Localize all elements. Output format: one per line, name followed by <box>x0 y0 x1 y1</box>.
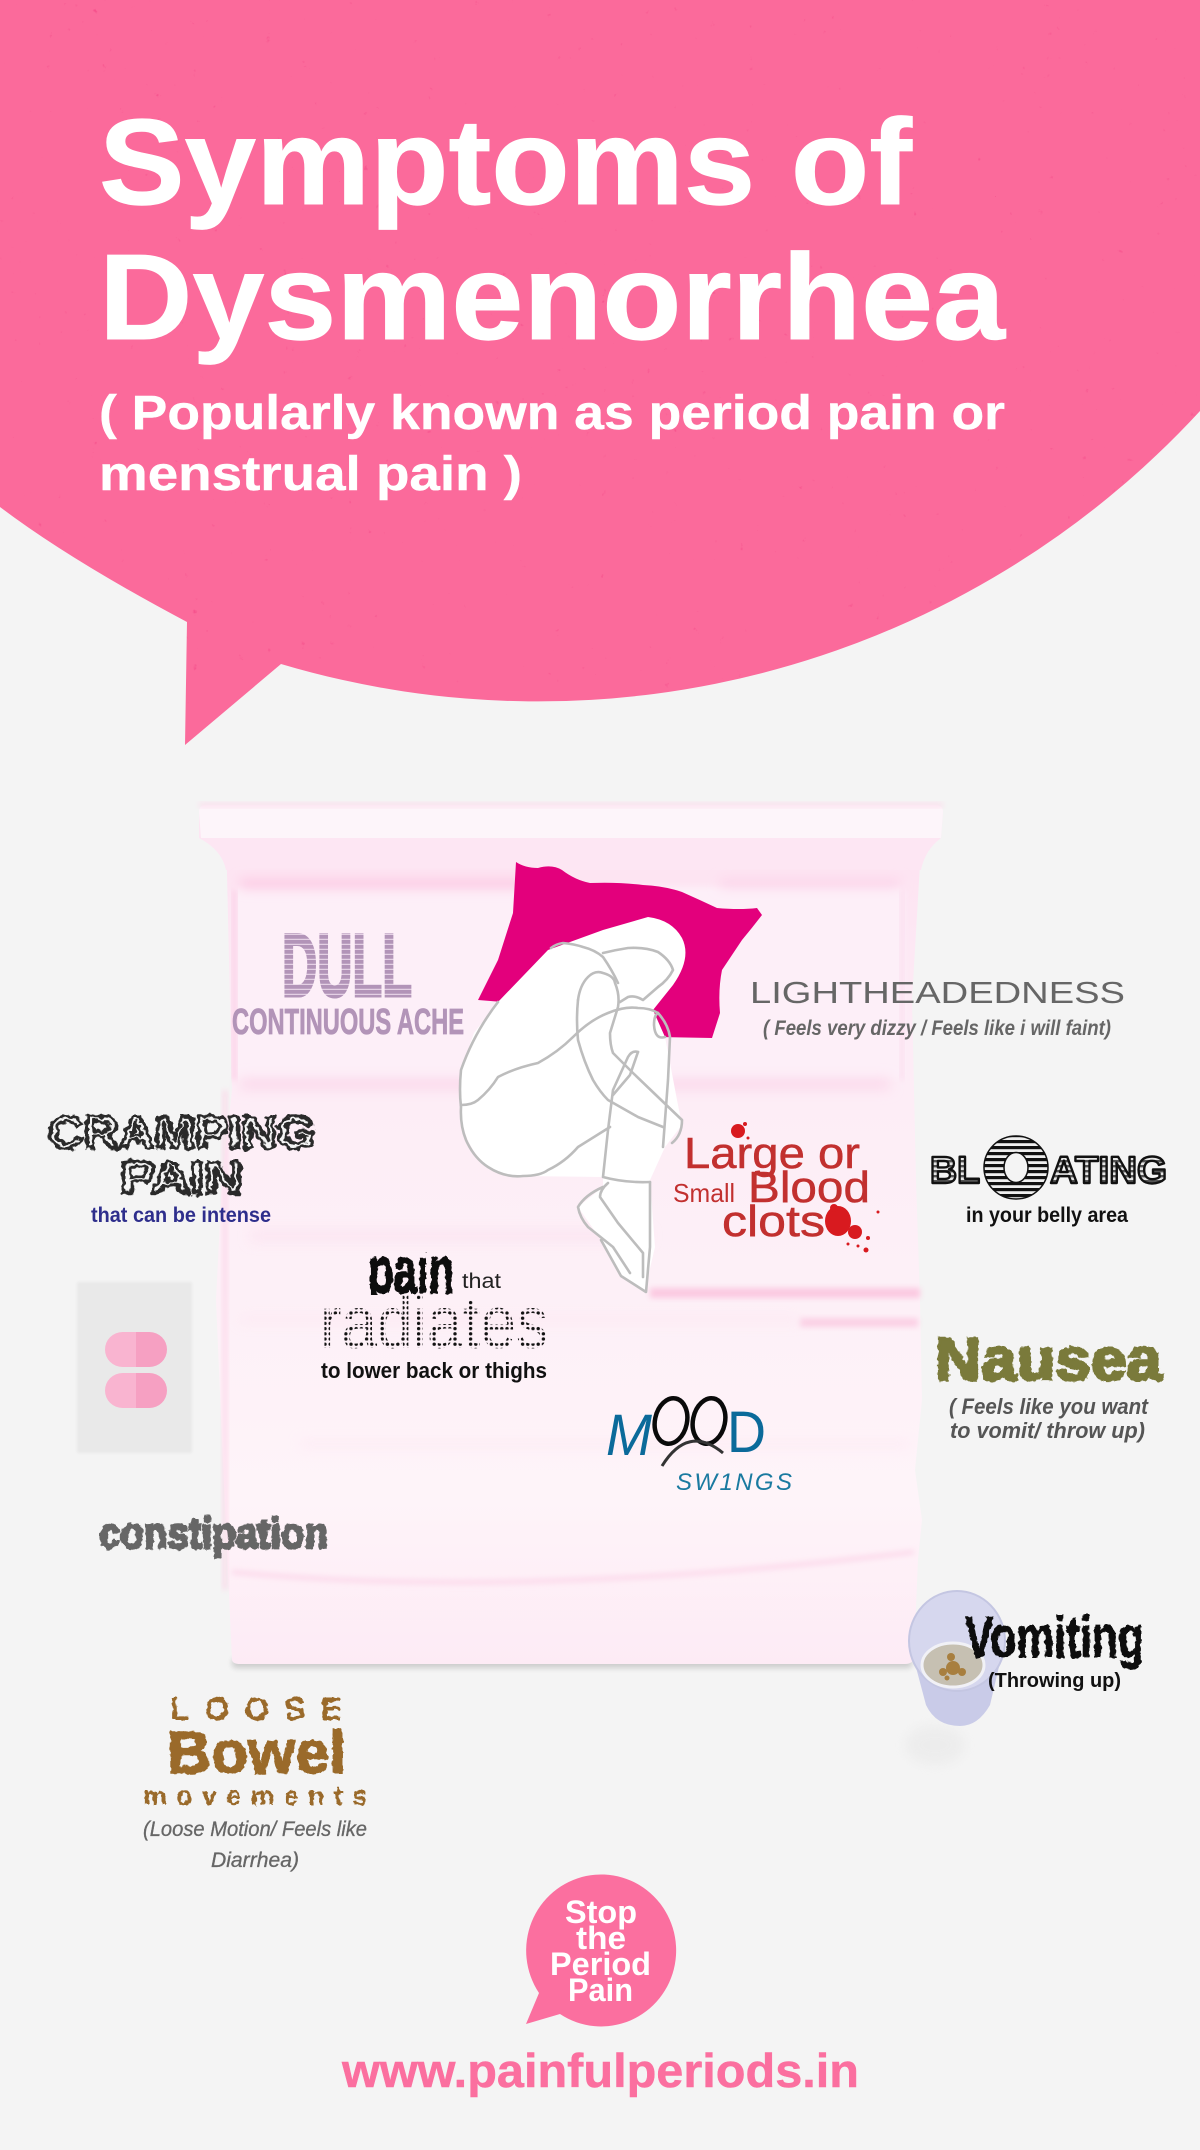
pain that radiates to lower back or thighs: to lower back or thighs <box>321 1358 547 1383</box>
icon: cup <box>905 1591 1005 1765</box>
loose bowel movements: (Loose Motion/ Feels like <box>143 1818 367 1841</box>
mattress <box>199 803 943 1668</box>
large or small blood clots: Blood <box>748 1163 870 1212</box>
loose bowel movements: Bowel <box>167 1719 346 1786</box>
mood swings: D <box>727 1400 766 1465</box>
nausea: ( Feels like you want <box>949 1394 1150 1419</box>
cramping pain: PAIN <box>120 1152 243 1203</box>
subtitle: menstrual pain ) <box>99 448 522 501</box>
nausea: to vomit/ throw up) <box>950 1418 1145 1443</box>
logo bubble: stop the period pain: Stop <box>565 1894 637 1930</box>
mood swings: SW1NGS <box>676 1469 792 1496</box>
large or small blood clots: Small <box>673 1178 735 1208</box>
loose bowel movements <box>143 1691 367 1872</box>
logo bubble: stop the period pain: Period <box>550 1946 651 1982</box>
pain that radiates to lower back or thighs <box>321 1252 546 1382</box>
pink pillow <box>478 862 762 1038</box>
header speech bubble <box>0 0 1200 745</box>
pillow panel <box>232 880 904 1090</box>
vomiting with icon cup <box>905 1591 1144 1765</box>
loose bowel movements: Diarrhea) <box>211 1849 299 1872</box>
logo bubble: stop the period pain: the <box>576 1920 626 1956</box>
title: Symptoms of <box>99 94 912 230</box>
DULL continuous ache: DULL <box>282 915 412 1015</box>
mood swings <box>606 1395 792 1496</box>
DULL continuous ache: CONTINUOUS ACHE <box>232 1001 464 1042</box>
vomiting with icon cup: (Throwing up) <box>988 1670 1121 1692</box>
lightheadedness: ( Feels very dizzy / Feels like i will faint) <box>763 1017 1111 1040</box>
mood swings: M <box>606 1403 653 1468</box>
curled up woman figure <box>460 917 685 1292</box>
pain that radiates to lower back or thighs: radiates <box>320 1281 548 1364</box>
lightheadedness <box>750 975 1125 1040</box>
loose bowel movements: LOOSE <box>170 1691 342 1727</box>
large or small blood clots: clots <box>722 1197 825 1246</box>
subtitle <box>99 387 1005 501</box>
cramping pain: that can be intense <box>91 1204 271 1227</box>
icon: big striped O <box>984 1136 1048 1199</box>
DULL continuous ache <box>232 915 464 1042</box>
lightheadedness: LIGHTHEADEDNESS <box>750 975 1125 1010</box>
bloating: ATING <box>1050 1150 1167 1192</box>
title <box>99 94 1006 365</box>
bloating <box>930 1136 1167 1227</box>
subtitle: ( Popularly known as period pain or <box>99 387 1005 440</box>
nausea <box>935 1326 1163 1443</box>
cramping pain: CRAMPING <box>48 1107 315 1158</box>
large or small blood clots: Large or <box>684 1129 860 1178</box>
logo bubble: stop the period pain: Pain <box>568 1972 633 2008</box>
constipation: constipation <box>99 1509 328 1558</box>
logo bubble: stop the period pain <box>526 1874 676 2026</box>
loose bowel movements: movements <box>143 1781 367 1811</box>
title: Dysmenorrhea <box>99 229 1006 365</box>
nausea: Nausea <box>935 1326 1163 1393</box>
large or small blood clots <box>673 1122 880 1252</box>
icon: pills on tissue <box>77 1282 192 1453</box>
icon: frown arc <box>662 1441 723 1466</box>
website url: www.painfulperiods.in <box>341 2044 859 2097</box>
pain that radiates to lower back or thighs: pain <box>368 1233 454 1307</box>
cramping pain <box>48 1107 315 1227</box>
bloating: BL <box>930 1150 980 1192</box>
pain that radiates to lower back or thighs: that <box>462 1270 501 1293</box>
icon: blood splatter <box>731 1122 880 1252</box>
bloating: in your belly area <box>966 1204 1128 1227</box>
